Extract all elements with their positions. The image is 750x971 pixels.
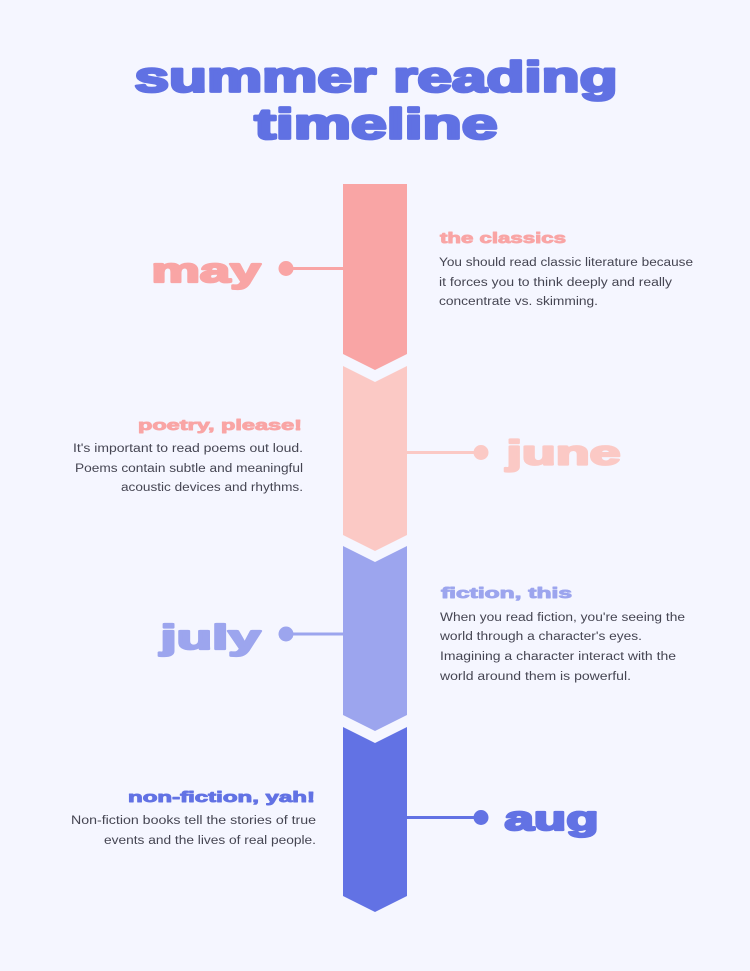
month label: june [407, 434, 620, 472]
text block: fiction, this: fiction, this [441, 586, 572, 602]
text block: poetry, please!: acoustic devices and rhythms. [121, 482, 303, 494]
month label: july [159, 619, 343, 657]
title: timeline [254, 100, 498, 148]
text block: non-fiction, yah!: Non-fiction books tell the stories of true [71, 815, 316, 827]
timeline arrow: july [343, 546, 407, 731]
month label: july: july [159, 619, 261, 657]
month label: june: june [505, 434, 620, 472]
month label: aug [407, 800, 598, 838]
text block: poetry, please!: It's important to read poems out loud. [73, 443, 303, 455]
text block: the classics: it forces you to think deeply and really [439, 277, 672, 289]
month label: aug: aug [504, 800, 598, 838]
text block: fiction, this: When you read fiction, you're seeing the [440, 612, 685, 624]
text block: the classics: concentrate vs. skimming. [439, 296, 598, 308]
text block: non-fiction, yah!: non-fiction, yah! [128, 790, 315, 806]
connector: may [278, 261, 343, 276]
connector: aug [407, 810, 488, 825]
timeline arrow: august [343, 727, 407, 912]
title: summer reading [134, 54, 618, 102]
connector: june [407, 445, 488, 460]
timeline arrow: may [343, 184, 407, 370]
text block: non-fiction, yah!: events and the lives of real people. [104, 835, 316, 847]
connector: july [278, 626, 343, 642]
text block: the classics [439, 231, 693, 308]
text block: fiction, this: world around them is powerful. [439, 671, 631, 683]
text block: the classics: You should read classic literature because [439, 257, 693, 269]
timeline arrow: june [343, 366, 407, 551]
text block: poetry, please!: Poems contain subtle and meaningful [75, 463, 303, 475]
text block: fiction, this [439, 586, 685, 683]
title [134, 54, 618, 148]
text block: non-fiction, yah! [71, 790, 316, 847]
text block: poetry, please! [73, 418, 303, 494]
text block: fiction, this: Imagining a character interact with the [440, 651, 676, 663]
text block: fiction, this: world through a character's eyes. [439, 631, 642, 643]
text block: the classics: the classics [440, 231, 566, 247]
month label: may: may [152, 252, 261, 290]
month label: may [152, 252, 343, 290]
text block: poetry, please!: poetry, please! [138, 418, 302, 434]
